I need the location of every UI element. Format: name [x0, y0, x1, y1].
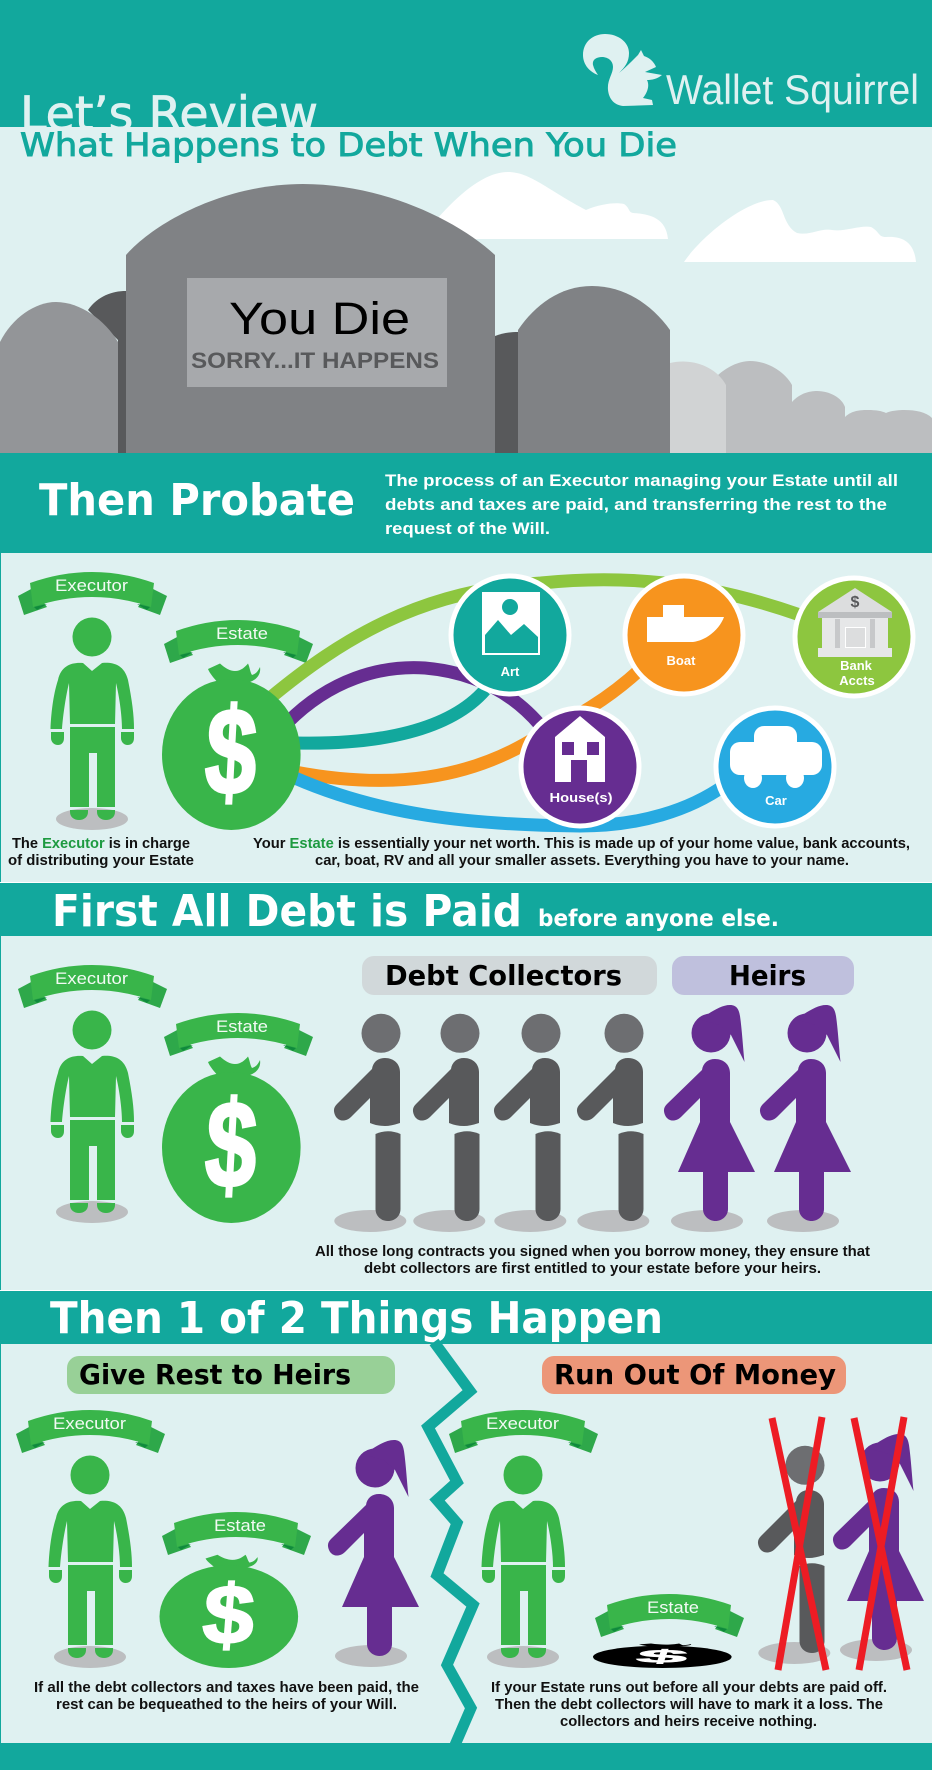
caption: estate: Your Estate is essentially your net worth. This is made up of your home value, bank accounts, — [253, 835, 910, 852]
estate banner: Estate — [216, 1017, 268, 1036]
caption: contracts: debt collectors are first entitled to your estate before your heirs. — [364, 1260, 821, 1277]
header band: Let’s Review — [20, 87, 318, 142]
left caption — [34, 1679, 419, 1713]
caption: contracts — [315, 1243, 870, 1277]
band: Then Probate — [0, 453, 932, 553]
asset: Boat — [625, 576, 743, 694]
asset: House: House(s) — [550, 790, 612, 805]
estate banner — [164, 1013, 313, 1056]
asset: Car — [716, 708, 834, 826]
heading pill: Run Out Of Money: Run Out Of Money — [554, 1358, 836, 1391]
right caption: collectors and heirs receive nothing. — [560, 1713, 817, 1730]
panel: outcomes — [0, 1342, 924, 1745]
executor figure — [50, 1010, 134, 1223]
left: executor banner — [16, 1410, 165, 1453]
title: What Happens to Debt When You Die: What Happens to Debt When You Die — [20, 126, 677, 164]
heading pill: Heirs: Heirs — [729, 959, 806, 992]
logo: Wallet Squirrel: Wallet Squirrel — [666, 66, 919, 113]
probate description: request of the Will. — [385, 520, 550, 538]
executor banner — [18, 572, 167, 615]
left: executor figure — [48, 1456, 132, 1668]
probate description — [385, 472, 898, 538]
right: executor banner — [449, 1410, 598, 1453]
asset: House — [521, 708, 639, 826]
panel: debt paid — [0, 936, 932, 1291]
left: estate banner: Estate — [214, 1516, 266, 1535]
heading pill: Give Rest to Heirs: Give Rest to Heirs — [79, 1358, 351, 1391]
band: First All Debt is Paid: First All Debt is Paid — [52, 886, 522, 937]
zigzag divider — [428, 1342, 473, 1745]
left: heir figure — [328, 1440, 419, 1667]
asset: Bank Accts: $ — [851, 594, 860, 611]
band: First All Debt is Paid — [0, 883, 932, 937]
heir figures — [664, 1005, 851, 1232]
left: executor banner: Executor — [53, 1414, 126, 1433]
caption: estate: car, boat, RV and all your smaller assets. Everything you have to your name. — [315, 852, 849, 869]
red crosses — [772, 1417, 907, 1670]
executor banner: Executor — [55, 969, 128, 988]
debt collector figures — [334, 1014, 649, 1232]
left: estate banner — [162, 1512, 311, 1555]
asset: Bank Accts: Accts — [839, 673, 875, 688]
asset: Bank Accts: Bank — [840, 658, 873, 673]
right: flattened estate bag: $ — [633, 1647, 691, 1667]
plaque: You Die: You Die — [229, 293, 410, 344]
left: estate money bag: $ — [200, 1567, 258, 1662]
heading pill: Heirs — [672, 956, 854, 995]
asset: Boat: Boat — [667, 653, 696, 668]
estate money bag — [162, 664, 301, 830]
header band — [0, 0, 932, 167]
estate banner: Estate — [216, 624, 268, 643]
probate description: debts and taxes are paid, and transferring the rest to the — [385, 496, 887, 514]
asset: Art: Art — [501, 664, 520, 679]
executor banner: Executor — [55, 576, 128, 595]
right: heir figure — [833, 1434, 924, 1661]
right: estate banner — [595, 1594, 744, 1637]
estate banner — [164, 620, 313, 663]
caption: estate — [253, 835, 910, 869]
left caption: If all the debt collectors and taxes have been paid, the — [34, 1679, 419, 1696]
caption: executor: The Executor is in charge — [12, 835, 190, 852]
clouds — [420, 172, 916, 262]
left caption: rest can be bequeathed to the heirs of your Will. — [56, 1696, 397, 1713]
heading pill: Debt Collectors — [362, 956, 657, 995]
caption: executor: of distributing your Estate — [8, 852, 194, 869]
band: Then 1 of 2 Things Happen: Then 1 of 2 Things Happen — [50, 1293, 663, 1344]
band: First All Debt is Paid: before anyone else. — [538, 906, 779, 932]
right: executor banner: Executor — [486, 1414, 559, 1433]
probate description: The process of an Executor managing your Estate until all — [385, 472, 898, 490]
panel: probate — [0, 553, 932, 883]
executor banner — [18, 965, 167, 1008]
asset: Bank Accts — [795, 578, 913, 696]
right caption: If your Estate runs out before all your debts are paid off. — [491, 1679, 887, 1696]
caption: executor — [8, 835, 194, 869]
band: Then 1 of 2 Things Happen — [0, 1291, 932, 1344]
estate money bag: $ — [202, 684, 260, 821]
plaque: You Die: SORRY...IT HAPPENS — [191, 348, 439, 373]
right: executor figure — [482, 1456, 565, 1668]
executor figure — [50, 618, 134, 830]
tombstones — [0, 184, 932, 453]
asset: Art — [451, 576, 569, 694]
caption: contracts: All those long contracts you signed when you borrow money, they ensure that — [315, 1243, 870, 1260]
asset: Car: Car — [765, 793, 787, 808]
plaque: You Die — [187, 278, 447, 387]
logo: Wallet Squirrel — [583, 34, 919, 113]
estate money bag: $ — [202, 1077, 260, 1214]
connecting lines — [270, 580, 800, 826]
left: estate money bag — [160, 1555, 298, 1668]
bottom band — [0, 1743, 932, 1770]
right caption: Then the debt collectors will have to mark it a loss. The — [495, 1696, 883, 1713]
right: flattened estate bag — [593, 1644, 732, 1668]
right: estate banner: Estate — [647, 1598, 699, 1617]
right: debt collector figure — [758, 1446, 830, 1664]
heading pill: Debt Collectors: Debt Collectors — [385, 959, 622, 992]
right caption — [491, 1679, 887, 1730]
band: Then Probate: Then Probate — [39, 475, 355, 526]
estate money bag — [162, 1056, 301, 1223]
